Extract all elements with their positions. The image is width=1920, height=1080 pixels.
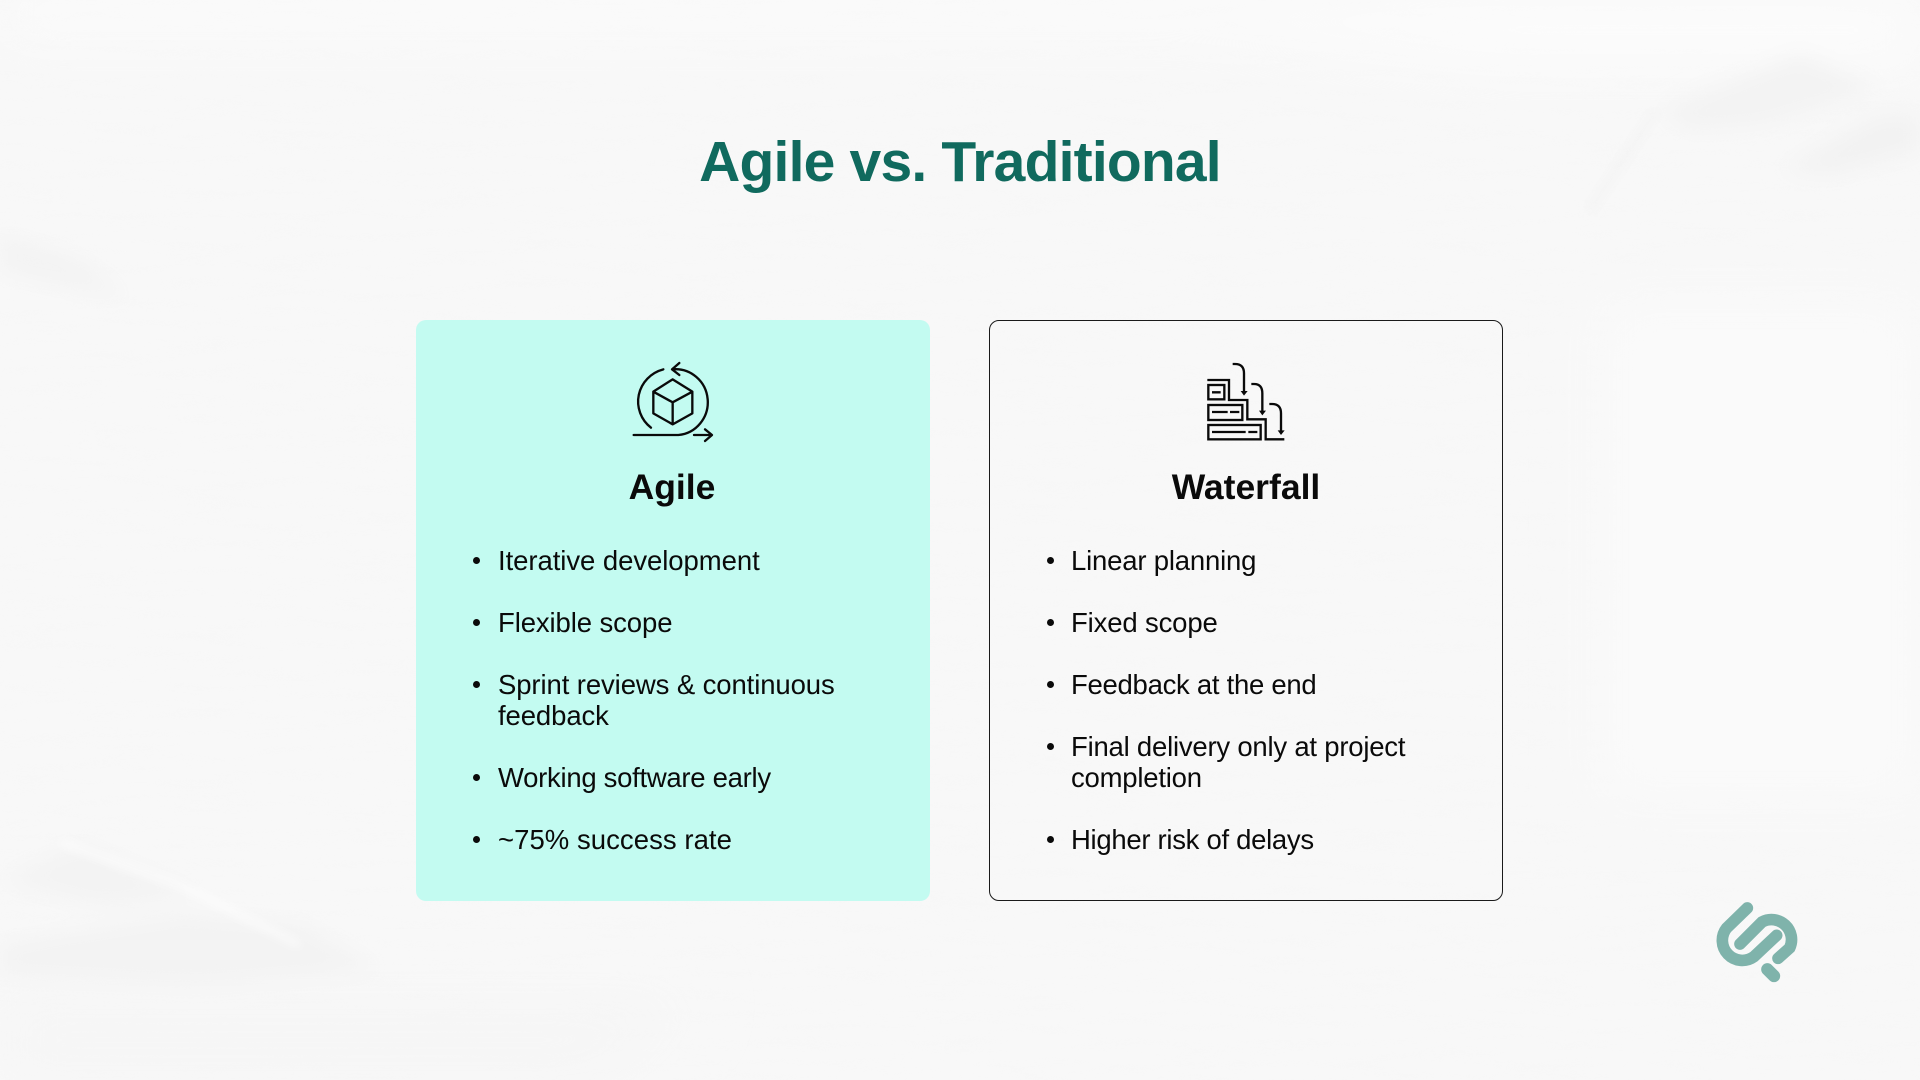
bullet: working software: Working software early — [498, 762, 771, 793]
heading: agile: Agile — [629, 467, 715, 507]
bullet: final delivery — [1047, 731, 1406, 793]
list: waterfall points — [1047, 545, 1406, 855]
icon: logo — [1716, 902, 1798, 982]
bullet: sprint reviews: feedback — [498, 700, 609, 731]
bullet: success rate: ~75% success rate — [498, 824, 732, 855]
bullet: final delivery: completion — [1071, 762, 1202, 793]
bullet: sprint reviews: Sprint reviews & continuous — [498, 669, 835, 700]
list: agile points — [473, 545, 835, 855]
bullet: feedback at end: Feedback at the end — [1071, 669, 1316, 700]
bullet: fixed scope: Fixed scope — [1071, 607, 1218, 638]
bullet: final delivery: Final delivery only at project — [1071, 731, 1405, 762]
icon: cycle with cube — [632, 362, 714, 442]
bullet: iterative development: Iterative development — [498, 545, 760, 576]
title: Agile vs. Traditional — [699, 130, 1221, 194]
heading: waterfall: Waterfall — [1172, 467, 1320, 507]
icon: waterfall stairs — [1207, 362, 1285, 440]
bullet: linear planning: Linear planning — [1071, 545, 1256, 576]
panel: waterfall — [989, 320, 1503, 901]
bullet: higher risk: Higher risk of delays — [1071, 824, 1314, 855]
bullet: flexible scope: Flexible scope — [498, 607, 672, 638]
panel: agile — [416, 320, 930, 901]
bullet: sprint reviews — [473, 669, 835, 731]
